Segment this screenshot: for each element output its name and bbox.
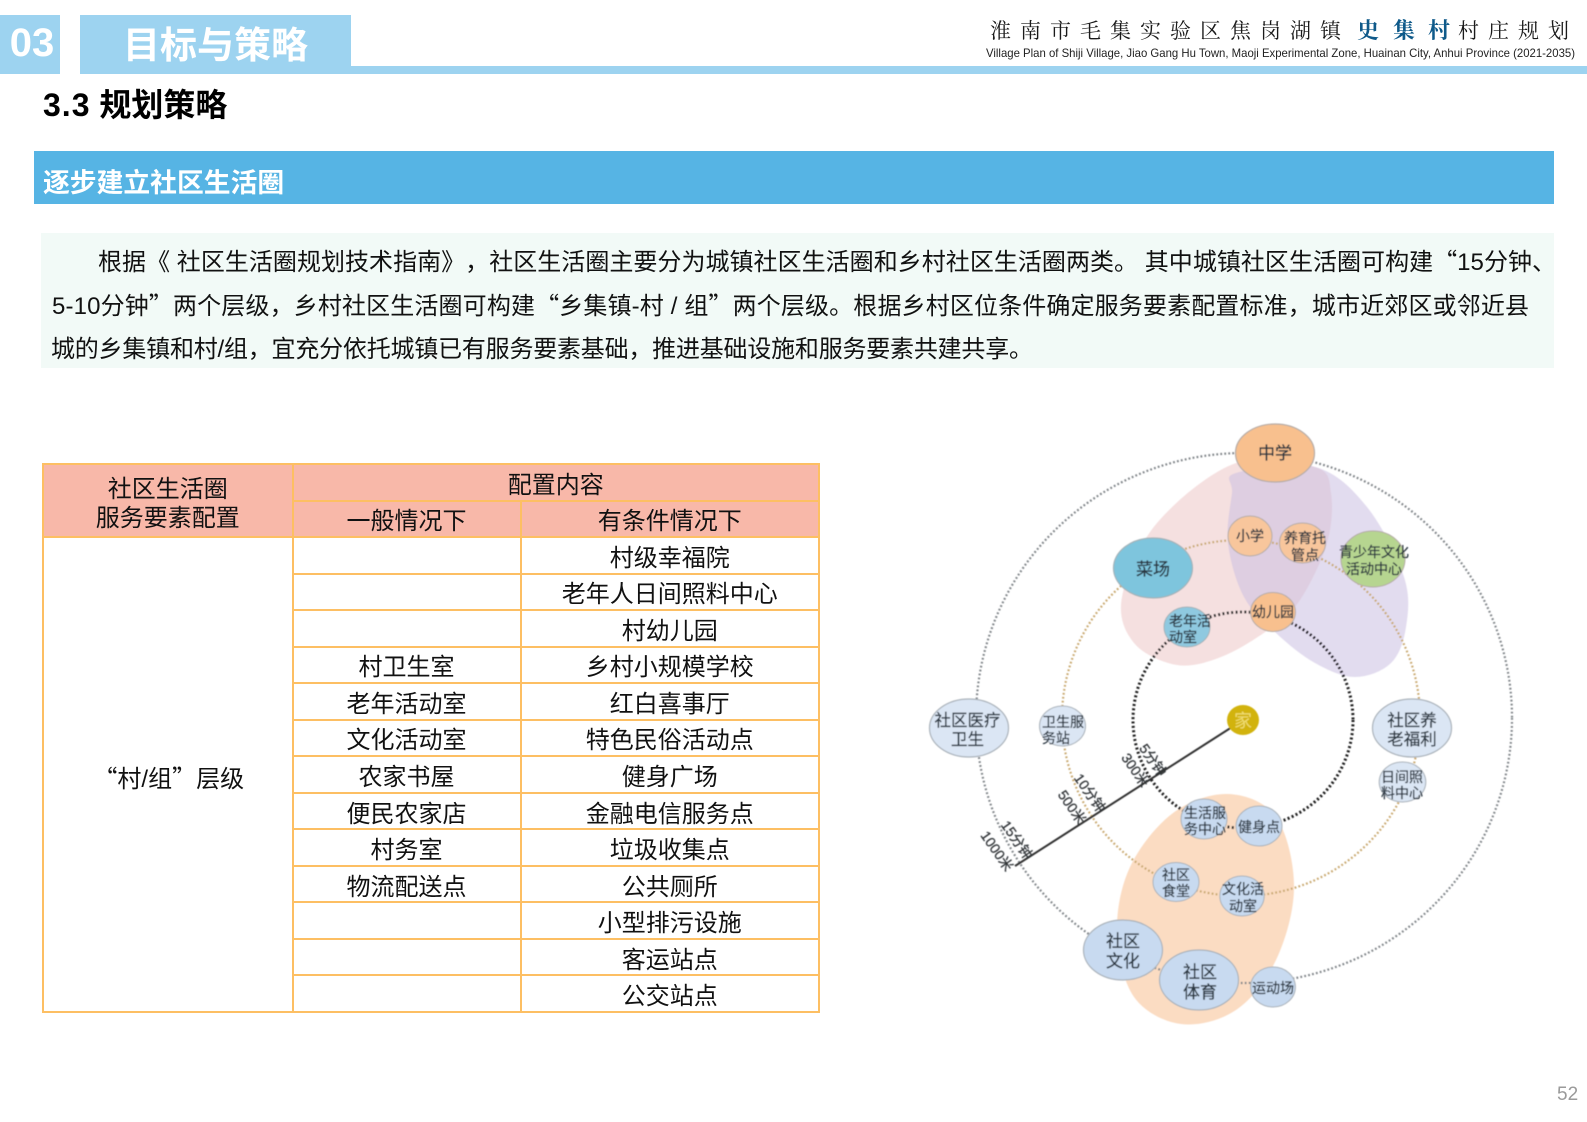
node: 健身点	[1236, 806, 1282, 846]
node: 青少年文化活动中心: 青少年文化	[1339, 544, 1409, 560]
table header row 1: 老年活动室	[346, 691, 466, 718]
node: 日间照料中心	[1379, 762, 1426, 802]
table header row 1: 特色民俗活动点	[586, 727, 754, 754]
middle ring: 10 minutes	[1062, 540, 1420, 896]
table header row 1: 便民农家店	[346, 801, 466, 828]
project title and subtitle: 村庄规划	[1458, 19, 1569, 43]
node: 老年活动室: 动室	[1169, 629, 1197, 645]
project title and subtitle: 史集村	[1357, 18, 1450, 43]
node: 社区体育: 体育	[1183, 983, 1217, 1002]
node: 菜场	[1114, 538, 1192, 598]
page number: 52	[1557, 1084, 1578, 1105]
table header row 1: 公共厕所	[622, 874, 718, 901]
node: 文化活动室	[1220, 876, 1264, 916]
intro paragraph panel	[41, 233, 1554, 368]
node: 文化活动室: 动室	[1229, 898, 1257, 914]
node: 社区体育	[1160, 950, 1238, 1010]
node: 日间照料中心: 日间照	[1381, 769, 1423, 785]
table header row 1: 健身广场	[622, 764, 718, 791]
node: 家	[1227, 705, 1259, 735]
node: 社区养老福利: 社区养	[1387, 711, 1437, 730]
table header row 1: 村务室	[370, 837, 442, 864]
table header row 1: 公交站点	[622, 983, 718, 1010]
radius labels: 15分钟	[998, 818, 1036, 862]
node: 运动场: 运动场	[1252, 980, 1294, 996]
node: 老年活动室: 老年活	[1169, 613, 1211, 629]
table header row 1: 村卫生室	[358, 654, 454, 681]
node: 中学: 中学	[1258, 444, 1292, 463]
intro paragraph panel: 5-10分钟”两个层级，乡村社区生活圈可构建“乡集镇-村 / 组”两个层级。根据乡村区位条件确定服务要素配置标准，城市近郊区或邻近县	[52, 286, 1529, 321]
table header row 1: “村/组”层级	[93, 759, 244, 794]
section heading: 3.3 规划策略	[43, 87, 227, 123]
node: 幼儿园	[1251, 592, 1295, 632]
node: 社区养老福利: 老福利	[1387, 730, 1437, 749]
table header row 1	[44, 465, 818, 1010]
outer ring: 15 minutes	[976, 453, 1512, 983]
table body rows: 村级幸福院	[610, 545, 730, 572]
node: 日间照料中心: 料中心	[1381, 785, 1423, 801]
table header row 1: 村幼儿园	[622, 618, 718, 645]
table body rows	[93, 545, 730, 794]
node: 卫生服务站: 卫生服	[1042, 714, 1084, 730]
table header row 1: 文化活动室	[346, 727, 466, 754]
node: 幼儿园: 幼儿园	[1252, 604, 1294, 620]
table header row 1: 物流配送点	[346, 874, 466, 901]
zone: pink blob	[1121, 459, 1332, 666]
node: 社区医疗卫生: 卫生	[951, 730, 984, 749]
node: 卫生服务站	[1040, 706, 1086, 746]
node: 老年活动室	[1164, 607, 1211, 647]
table header row 1: 垃圾收集点	[610, 837, 730, 864]
zone: lavender blob	[1228, 465, 1408, 677]
node: 社区医疗卫生: 社区医疗	[934, 711, 1000, 730]
table header row 1: 小型排污设施	[598, 910, 742, 937]
radius labels: 1000米	[977, 828, 1017, 874]
node: 文化活动室: 文化活	[1222, 881, 1264, 897]
table header row 2	[294, 502, 818, 536]
node: 养育托管点: 养育托	[1284, 530, 1326, 546]
node: 社区食堂: 食堂	[1162, 883, 1190, 899]
section number badge	[0, 15, 60, 74]
zone: orange ellipse	[1117, 794, 1294, 1024]
node: 社区体育: 社区	[1183, 963, 1217, 982]
node: 生活服务中心: 生活服	[1184, 805, 1226, 821]
node: 社区文化: 文化	[1106, 952, 1140, 971]
table header row 1: 红白喜事厅	[610, 691, 730, 718]
table header row 1: 配置内容	[508, 472, 604, 499]
inner ring: 5 minutes	[1133, 612, 1353, 828]
node: 青少年文化活动中心: 活动中心	[1346, 561, 1402, 577]
blue subheading band	[34, 151, 1554, 204]
node: 生活服务中心: 务中心	[1184, 821, 1226, 837]
diagram: life circle rings	[928, 422, 1514, 1025]
chapter title bar	[80, 15, 351, 74]
table header row 1: 金融电信服务点	[586, 801, 754, 828]
table header row 2: 有条件情况下	[598, 508, 742, 535]
blue subheading band: 逐步建立社区生活圈	[43, 168, 284, 198]
radius labels: 300米	[1118, 750, 1153, 790]
table header row 1: 乡村小规模学校	[586, 654, 754, 681]
node: 社区文化: 社区	[1106, 932, 1140, 951]
node: 卫生服务站: 务站	[1042, 730, 1070, 746]
project title and subtitle	[986, 18, 1575, 60]
node: 社区文化	[1084, 920, 1162, 980]
radius labels: 500米	[1055, 787, 1089, 827]
table header row 2: 一般情况下	[346, 508, 466, 535]
node: 养育托管点	[1280, 523, 1326, 563]
node: 生活服务中心	[1181, 799, 1227, 839]
table header row 1: 客运站点	[622, 947, 718, 974]
radius labels: 5分钟	[1136, 741, 1170, 779]
radius labels	[977, 741, 1170, 874]
section number badge: 03	[10, 21, 54, 65]
project title and subtitle: 淮南市毛集实验区焦岗湖镇	[990, 19, 1343, 43]
table header row 1: 服务要素配置	[96, 505, 240, 532]
node: 社区食堂	[1153, 862, 1199, 902]
node: 菜场: 菜场	[1136, 560, 1170, 579]
node: 运动场	[1251, 967, 1295, 1007]
radius labels: 10分钟	[1071, 771, 1109, 815]
node: 小学: 小学	[1236, 528, 1264, 544]
intro paragraph panel: 城的乡集镇和村/组，宜充分依托城镇已有服务要素基础，推进基础设施和服务要素共建共享。	[51, 336, 1033, 363]
node: 养育托管点: 管点	[1291, 547, 1319, 563]
node: 健身点: 健身点	[1238, 819, 1280, 835]
table header row 1: 农家书屋	[358, 764, 454, 791]
table: community life circle service configuration	[42, 463, 820, 1013]
table header row 1: 社区生活圈	[108, 476, 228, 503]
node: 社区养老福利	[1372, 699, 1452, 757]
chapter title bar: 目标与策略	[123, 25, 308, 66]
header rule	[351, 66, 1587, 74]
table header row 1: 老年人日间照料中心	[562, 581, 778, 608]
node: 青少年文化活动中心	[1339, 531, 1409, 587]
radius line	[1015, 720, 1243, 866]
node: 社区医疗卫生	[930, 699, 1008, 757]
node: 小学	[1228, 516, 1272, 556]
node: 家: 家	[1234, 711, 1252, 731]
node: 社区食堂: 社区	[1162, 867, 1190, 883]
node: 中学	[1236, 424, 1314, 482]
intro paragraph panel: 根据《 社区生活圈规划技术指南》，社区生活圈主要分为城镇社区生活圈和乡村社区生活圈两类。 其中城镇社区生活圈可构建“15分钟、	[98, 242, 1554, 277]
